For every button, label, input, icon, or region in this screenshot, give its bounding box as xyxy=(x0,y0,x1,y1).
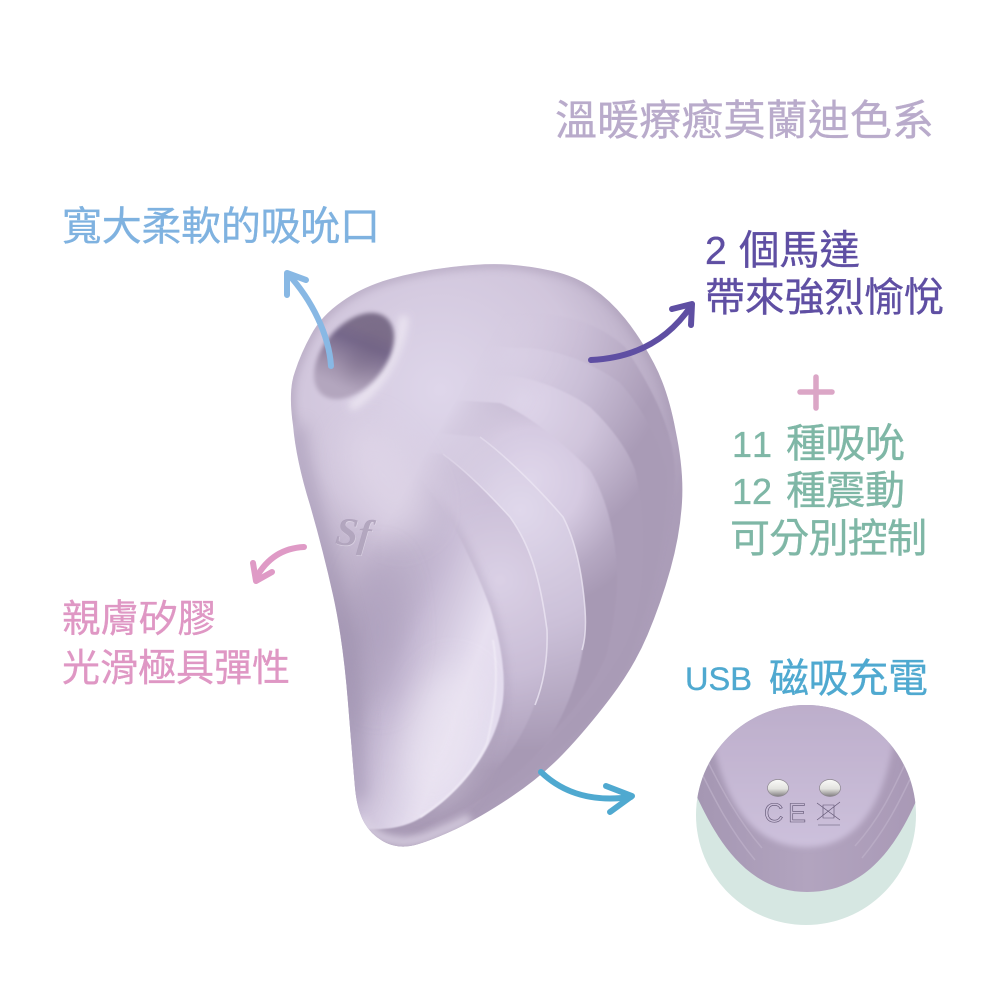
arrow: two motors xyxy=(591,304,692,360)
callout: usb charging xyxy=(685,657,928,701)
callout: modes: 種震動 xyxy=(786,469,905,513)
callout: two motors: 2 xyxy=(705,230,727,273)
certification marks: E xyxy=(788,798,806,828)
arrow: usb charging xyxy=(541,772,632,812)
ridge highlights xyxy=(443,454,547,705)
callout: silicone: 親膚矽膠 xyxy=(62,598,216,641)
callout: silicone: 光滑極具彈性 xyxy=(62,648,290,690)
callout: modes: 種吸吮 xyxy=(786,422,905,466)
callout: usb charging: 磁吸充電 xyxy=(769,657,928,701)
charging pins xyxy=(768,780,840,796)
suction opening xyxy=(298,298,410,414)
arrow: suction opening xyxy=(287,273,331,366)
certification marks: C xyxy=(764,798,784,828)
soft shading xyxy=(363,464,423,530)
callout: modes: 12 xyxy=(732,471,772,512)
callout: suction opening: 寬大柔軟的吸吮口 xyxy=(62,205,380,249)
callout: silicone xyxy=(62,598,290,690)
arrow: silicone xyxy=(253,547,304,581)
icon: plus xyxy=(800,377,832,408)
brand mark: Sf xyxy=(334,508,377,557)
certification marks xyxy=(764,798,840,828)
callout: modes: 可分別控制 xyxy=(730,517,927,561)
title: 溫暖療癒莫蘭迪色系 xyxy=(555,97,934,144)
callout: usb charging: USB xyxy=(685,661,752,697)
callout: two motors xyxy=(705,227,944,320)
inset: charging contacts xyxy=(696,705,916,925)
callout: modes xyxy=(730,422,927,561)
product illustration xyxy=(290,264,682,847)
callout: modes: 11 xyxy=(732,424,772,465)
brand mark: Sf xyxy=(334,509,378,558)
callout: two motors: 個馬達 xyxy=(739,227,860,273)
callout: two motors: 帶來強烈愉悅 xyxy=(705,276,944,320)
